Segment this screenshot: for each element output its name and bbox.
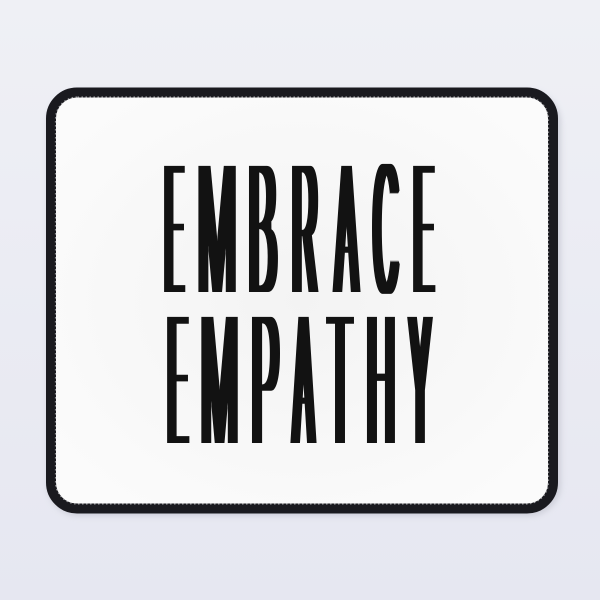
slogan line 1: EMBRACE: C bbox=[374, 120, 398, 338]
slogan line 2: EMPATHY: Y bbox=[409, 271, 431, 489]
slogan line 1: EMBRACE: E bbox=[165, 120, 183, 338]
slogan line 1: EMBRACE: B bbox=[249, 120, 277, 338]
slogan line 2: EMPATHY: E bbox=[168, 271, 187, 489]
slogan line 2: EMPATHY: A bbox=[293, 271, 314, 489]
slogan line 1: EMBRACE: A bbox=[335, 120, 358, 338]
mat drop shadow bbox=[47, 91, 561, 516]
slogan line 2: EMPATHY: T bbox=[328, 271, 352, 489]
slogan line 1: EMBRACE: R bbox=[292, 120, 317, 338]
mat surface with stitched border bbox=[51, 92, 553, 508]
slogan line 2: EMPATHY: M bbox=[201, 271, 238, 489]
slogan line 2: EMPATHY: P bbox=[252, 271, 279, 489]
slogan line 1: EMBRACE: E bbox=[414, 120, 433, 338]
slogan line 2: EMPATHY: H bbox=[367, 271, 395, 489]
slogan line 1: EMBRACE: M bbox=[198, 120, 237, 338]
